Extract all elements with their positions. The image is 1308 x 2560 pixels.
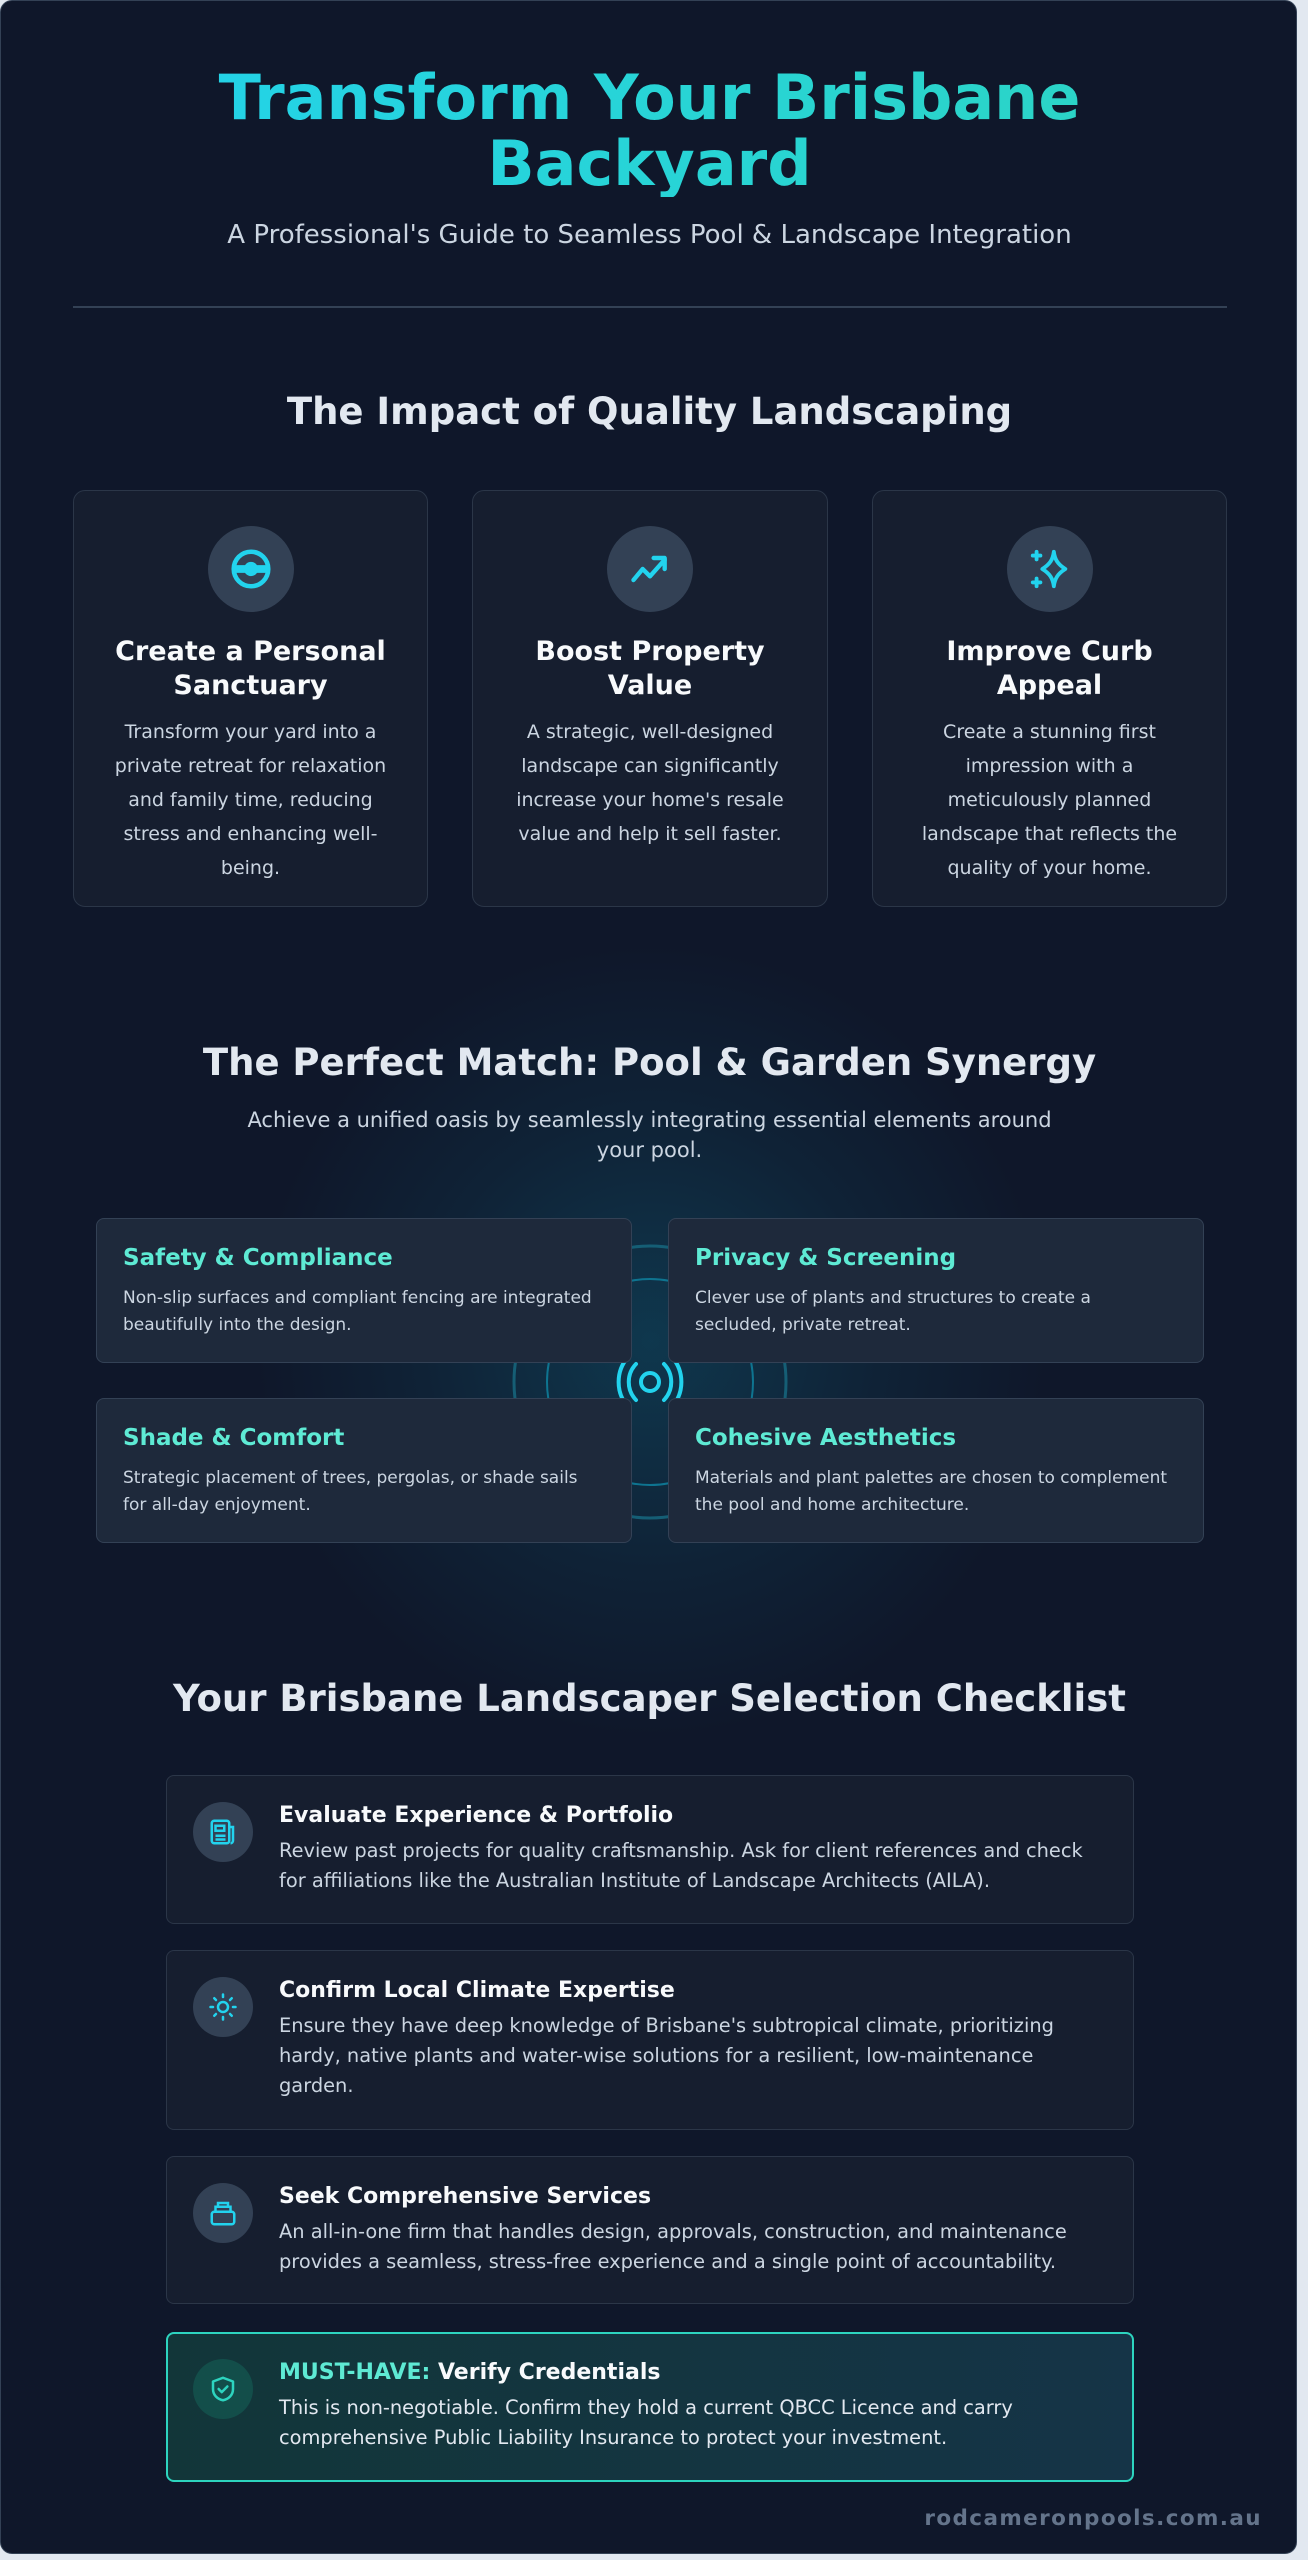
heading: impact: The Impact of Quality Landscaping — [287, 390, 1012, 433]
card text: Transform your yard into a private retreat for relaxation and family time, reducing stress and enhancing well-being. — [115, 721, 386, 879]
checklist: climate — [166, 1950, 1134, 2130]
heading: checklist: Your Brisbane Landscaper Selection Checklist — [173, 1677, 1126, 1720]
card: property value — [472, 490, 828, 907]
title: Backyard — [487, 127, 812, 200]
item title: Evaluate Experience & Portfolio — [279, 1803, 673, 1828]
item title: Seek Comprehensive Services — [279, 2184, 651, 2209]
card title: Create a Personal Sanctuary — [115, 636, 386, 701]
footer: website: rodcameronpools.com.au — [924, 2506, 1262, 2531]
card text: Create a stunning first impression with a meticulously planned landscape that reflects the quality of your home. — [922, 721, 1177, 879]
item title: MUST-HAVE: Verify Credentials — [279, 2360, 660, 2385]
item text: Review past projects for quality craftsmanship. Ask for client references and check for affiliations like the Australian Institute of Landscape Architects (AILA). — [279, 1839, 1083, 1892]
synergy subtitle: Achieve a unified oasis by seamlessly integrating essential elements around your pool. — [247, 1108, 1052, 1162]
panel text: Clever use of plants and structures to create a secluded, private retreat. — [695, 1288, 1091, 1335]
panel text: Non-slip surfaces and compliant fencing are integrated beautifully into the design. — [123, 1288, 592, 1335]
icon: portfolio — [193, 1802, 253, 1862]
panel title: Cohesive Aesthetics — [695, 1425, 956, 1451]
subtitle: A Professional's Guide to Seamless Pool & Landscape Integration — [227, 220, 1072, 250]
card: sanctuary — [73, 490, 428, 907]
item text: This is non-negotiable. Confirm they hold a current QBCC Licence and carry comprehensive Public Liability Insurance to protect your investment. — [279, 2396, 1013, 2449]
card: curb appeal — [872, 490, 1227, 907]
icon: sparkles — [1006, 526, 1092, 612]
item title: Confirm Local Climate Expertise — [279, 1978, 675, 2003]
panel: shade — [96, 1398, 632, 1543]
icon: services — [193, 2183, 253, 2243]
title — [1, 65, 1298, 197]
panel text: Strategic placement of trees, pergolas, or shade sails for all-day enjoyment. — [123, 1468, 578, 1515]
icon: sun — [193, 1977, 253, 2037]
checklist: credentials (highlight) — [166, 2332, 1134, 2482]
card title: Boost Property Value — [535, 636, 765, 701]
card title: Improve Curb Appeal — [946, 636, 1153, 701]
panel text: Materials and plant palettes are chosen to complement the pool and home architecture. — [695, 1468, 1167, 1515]
heading: synergy: The Perfect Match: Pool & Garden Synergy — [203, 1041, 1096, 1084]
icon: trend up — [607, 526, 693, 612]
panel title: Shade & Comfort — [123, 1425, 344, 1451]
checklist: services — [166, 2156, 1134, 2304]
panel title: Safety & Compliance — [123, 1245, 393, 1271]
panel: safety — [96, 1218, 632, 1363]
icon: sanctuary — [208, 526, 294, 612]
center icon with rings — [512, 1244, 788, 1520]
icon: shield — [193, 2359, 253, 2419]
item text: Ensure they have deep knowledge of Brisbane's subtropical climate, prioritizing hardy, native plants and water-wise solutions for a resilient, low-maintenance garden. — [279, 2014, 1054, 2097]
title: Transform Your Brisbane — [219, 61, 1080, 134]
card text: A strategic, well-designed landscape can significantly increase your home's resale value and help it sell faster. — [516, 721, 784, 845]
item text: An all-in-one firm that handles design, approvals, construction, and maintenance provides a seamless, stress-free experience and a single point of accountability. — [279, 2220, 1067, 2273]
panel: aesthetics — [668, 1398, 1204, 1543]
panel: privacy — [668, 1218, 1204, 1363]
panel title: Privacy & Screening — [695, 1245, 956, 1271]
checklist: experience — [166, 1775, 1134, 1924]
